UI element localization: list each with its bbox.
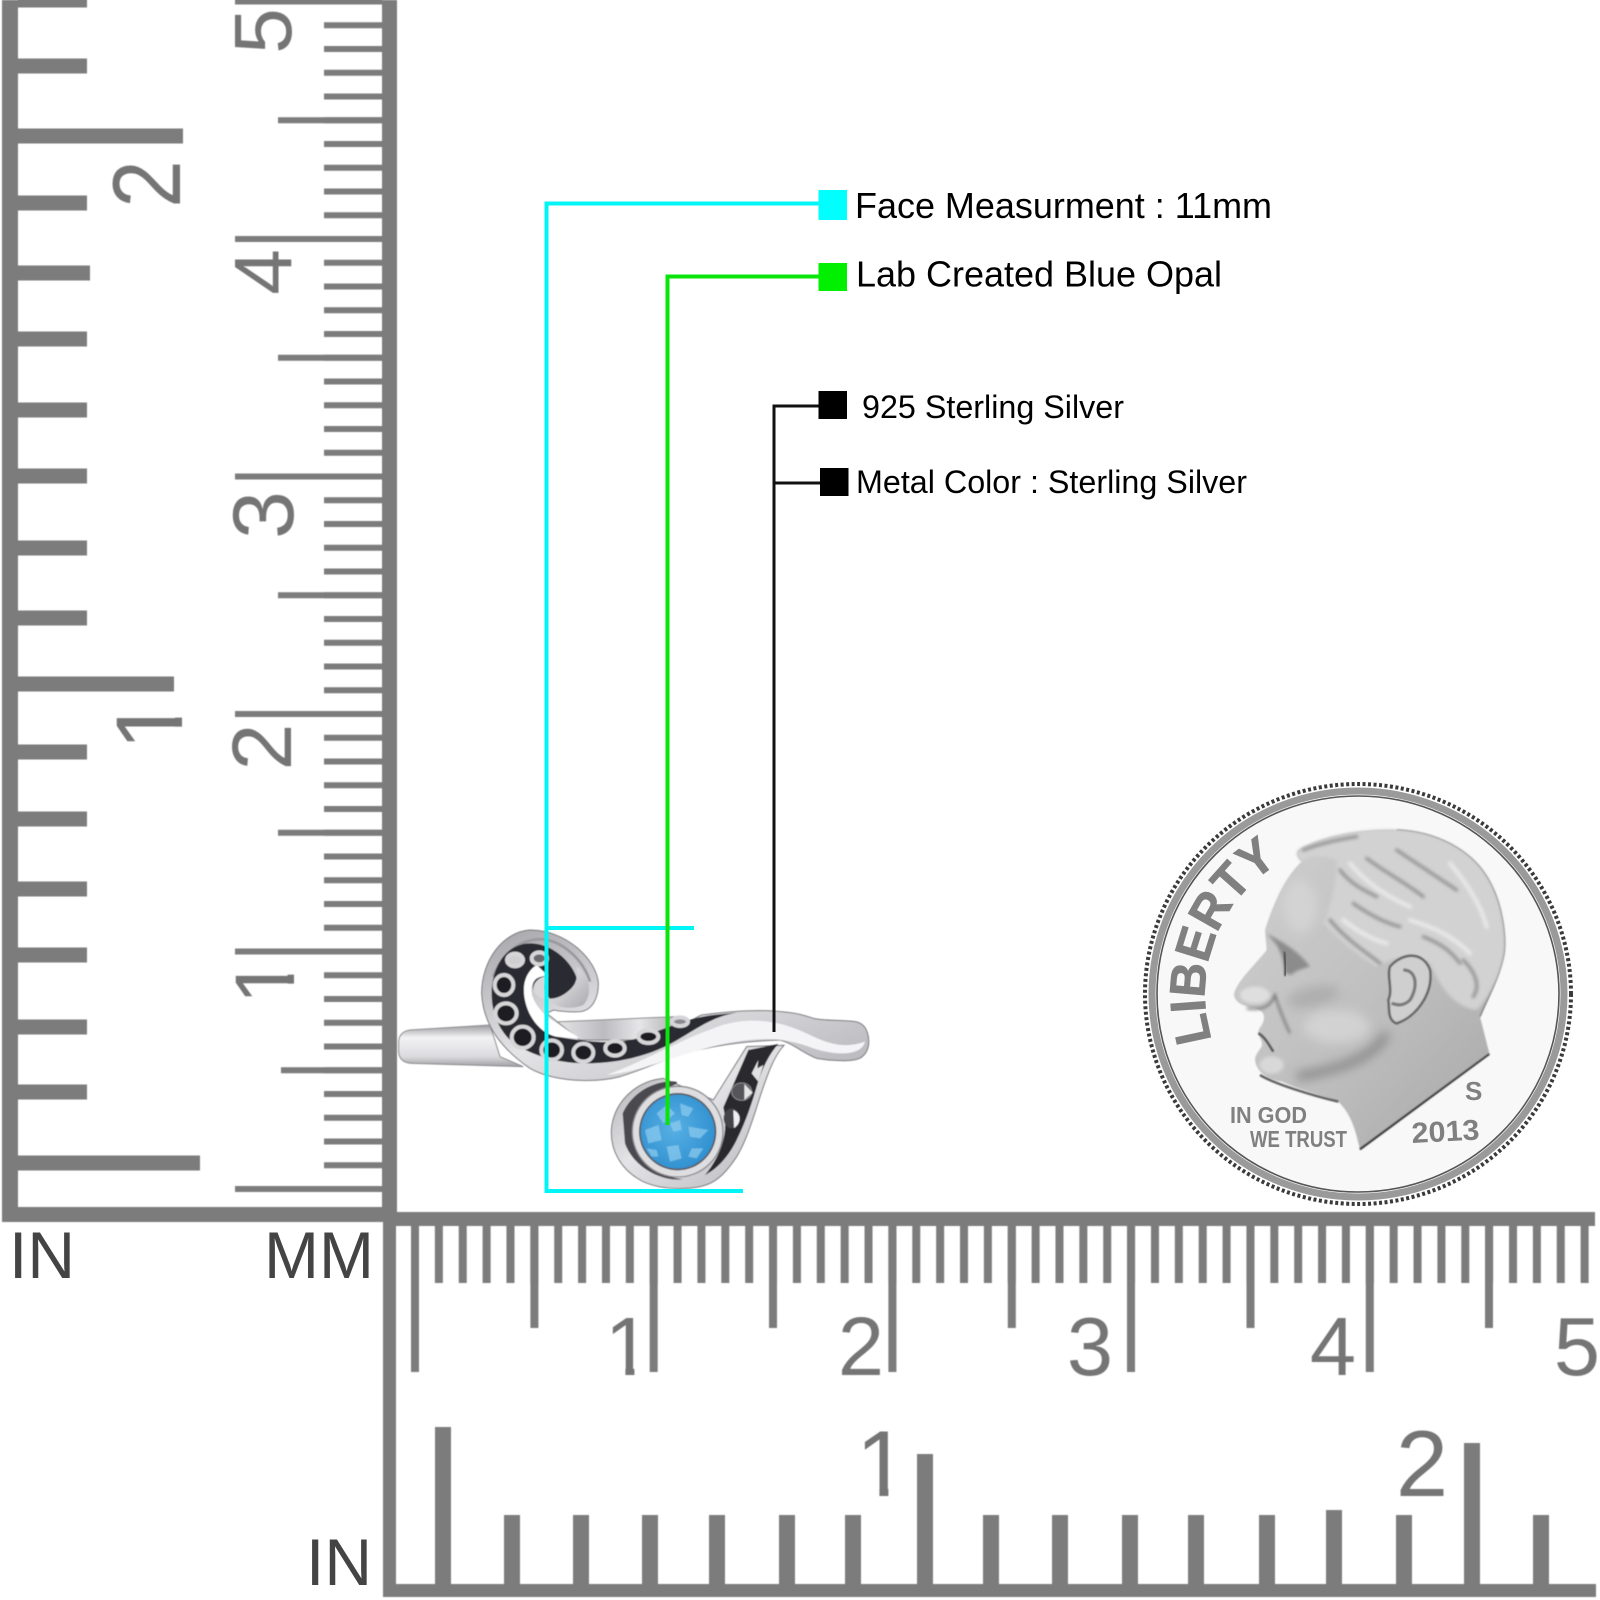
chin highlight <box>1260 1056 1284 1074</box>
cyan marker <box>818 190 847 220</box>
curl rim shadow <box>493 939 590 982</box>
millimetre numbers <box>612 1316 1598 1377</box>
IN GOD: IN GOD <box>1230 1102 1307 1128</box>
head silhouette <box>1234 830 1504 1150</box>
millimetre major ticks <box>415 1226 1489 1372</box>
millimetre number 4: 4 <box>218 249 309 295</box>
ruler frame <box>383 1212 1596 1597</box>
coin portrait <box>1234 830 1504 1150</box>
jaw shadow <box>1297 1033 1387 1077</box>
nose underside <box>1247 995 1290 1033</box>
green marker <box>818 263 847 291</box>
legend: face measurement <box>818 185 1272 226</box>
millimetre numbers: 1 <box>605 1300 651 1393</box>
millimetre numbers: 4 <box>1310 1300 1356 1393</box>
millimetre short ticks <box>324 0 382 1192</box>
blue opal stone <box>641 1095 715 1169</box>
millimetre number 1: 1 <box>218 958 312 1004</box>
nose highlight <box>1240 987 1270 1003</box>
metal color label: Metal Color : Sterling Silver <box>856 464 1247 500</box>
unit labels <box>9 1218 374 1599</box>
lower tail dark strip <box>705 1044 778 1175</box>
year: 2013 <box>1411 1114 1480 1150</box>
LIBERTY: LIBERTY <box>1170 834 1270 1045</box>
coin lettering <box>1170 834 1482 1152</box>
millimetre major ticks <box>235 2 382 1189</box>
black marker <box>820 468 848 496</box>
ring left band <box>399 1025 523 1067</box>
mouth <box>1258 1033 1273 1052</box>
unit label inches, bottom: IN <box>306 1525 372 1599</box>
opal flecks <box>645 1103 708 1162</box>
cheek hollow <box>1285 981 1341 1012</box>
legend: silver <box>818 389 1124 425</box>
stone seat <box>639 1093 716 1170</box>
inch ticks <box>443 1427 1541 1584</box>
sucker rings <box>495 952 688 1062</box>
top measure line <box>546 926 694 930</box>
inch number 1: 1 <box>97 698 203 750</box>
green leader: stone <box>668 276 819 1125</box>
eye slit <box>1284 952 1286 976</box>
neck cut line <box>1360 1054 1489 1149</box>
lower tail silver <box>611 1045 784 1188</box>
curl inner ball <box>534 976 550 999</box>
coin reeded edge <box>1145 784 1571 1204</box>
WE TRUST: WE TRUST <box>1250 1126 1347 1152</box>
ring back band <box>540 1017 682 1042</box>
left vertical ruler <box>2 0 397 1222</box>
coin: dime <box>1143 782 1573 1206</box>
lower tail suckers <box>724 1060 763 1128</box>
millimetre numbers: 5 <box>1554 1300 1600 1393</box>
mint mark: S <box>1465 1076 1482 1106</box>
black marker <box>818 391 847 419</box>
bezel dark crescent <box>623 1081 683 1180</box>
unit label inches, left: IN <box>9 1218 75 1292</box>
hair <box>1297 830 1504 1010</box>
coin inner ring <box>1157 796 1559 1192</box>
millimetre numbers: 2 <box>838 1300 884 1393</box>
tentacle and curl silver body <box>482 930 869 1080</box>
black leader: metal <box>774 406 820 1032</box>
stone label: Lab Created Blue Opal <box>856 254 1222 294</box>
spiral highlight <box>524 965 580 1038</box>
inch ticks <box>18 0 200 1163</box>
head back outline <box>1397 830 1504 1017</box>
brow and eye <box>1267 933 1310 975</box>
ear inner <box>1392 970 1415 1005</box>
inch numbers: 1 <box>856 1411 908 1516</box>
curl tip highlight <box>548 967 589 1008</box>
coin rim <box>1152 791 1564 1197</box>
tentacle dark suction strip <box>492 943 737 1063</box>
ring illustration <box>399 930 869 1188</box>
ear <box>1388 956 1430 1023</box>
silver label: 925 Sterling Silver <box>862 389 1124 425</box>
unit label millimetres: MM <box>264 1218 374 1292</box>
cyan leader: face measurement <box>546 204 819 1191</box>
millimetre number 5: 5 <box>218 8 309 54</box>
cheek highlight <box>1303 1010 1370 1043</box>
inch numbers: 2 <box>1396 1411 1448 1516</box>
horizontal ruler <box>383 1212 1600 1597</box>
inch number 2: 2 <box>93 160 201 208</box>
legend: stone <box>818 254 1222 294</box>
hair strands <box>1303 837 1477 997</box>
forehead highlight <box>1283 880 1317 933</box>
legend: metal color <box>820 464 1247 500</box>
hair highlights <box>1343 863 1487 953</box>
millimetre numbers: 3 <box>1067 1300 1113 1393</box>
face measurement label: Face Measurment : 11mm <box>855 185 1272 226</box>
right band highlight <box>607 1021 865 1075</box>
millimetre short ticks <box>411 1226 1596 1283</box>
millimetre number 2: 2 <box>215 724 309 770</box>
inch numbers <box>864 1430 1444 1497</box>
leader to cyan marker <box>546 204 819 1191</box>
ruler frame <box>2 0 397 1222</box>
chin underside <box>1260 1075 1338 1102</box>
stone bezel <box>632 1086 723 1177</box>
millimetre number 3: 3 <box>216 491 312 539</box>
